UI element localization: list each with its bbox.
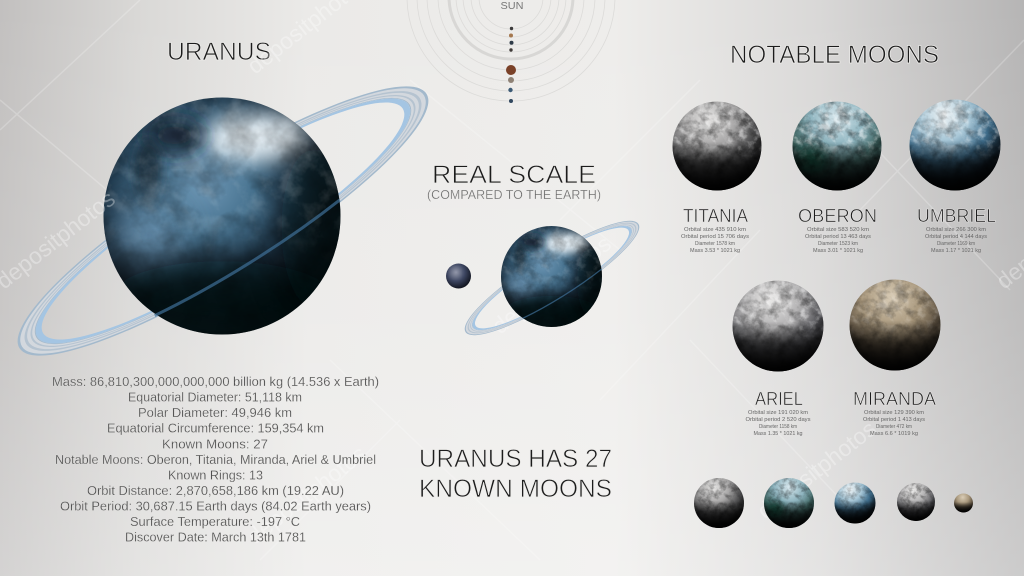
planet facts: Discover Date: March 13th 1781 [125,530,306,545]
moon: Miranda: MIRANDA [853,389,936,409]
ring front arc [155,200,343,320]
moons size comparison row [694,478,973,528]
planet facts: Equatorial Diameter: 51,118 km [128,390,302,405]
planet facts: Polar Diameter: 49,946 km [138,405,292,420]
watermarks: depositphotos [752,415,881,524]
moon: Ariel [732,280,824,437]
moon: Oberon: OBERON [798,206,877,226]
planet [104,98,352,337]
moon: Titania: Diameter 1578 km [695,241,735,247]
moon: Oberon: Orbital size 583 520 km [807,227,869,233]
moon: Titania: Orbital size 435 910 km [684,227,746,233]
title: Uranus: URANUS [167,38,271,66]
moon: Titania: Orbital period 15 706 days [681,234,749,240]
moon: Titania [672,102,762,254]
planet facts: Surface Temperature: -197 °C [130,514,300,529]
planet facts: Orbit Period: 30,687.15 Earth days (84.02 Earth years) [60,499,371,514]
planet facts: Equatorial Circumference: 159,354 km [107,421,324,436]
moon: Miranda: Orbital size 129 390 km [864,410,924,416]
moon: Miranda [850,280,940,437]
moon: Umbriel: Mass 1.17 * 1021 kg [931,248,981,254]
moon: Umbriel: Orbital size 266 300 km [926,227,986,233]
solar system planets [506,27,516,103]
moon: Oberon [792,102,882,254]
heading: real scale: REAL SCALE [432,161,596,189]
heading: real scale [427,161,601,202]
watermarks: depositphotos [487,230,616,339]
moon: Ariel: ARIEL [755,389,803,409]
moon: Titania: Mass 3.53 * 1021 kg [690,248,740,254]
watermarks: depositphotos [242,440,371,549]
scale comparison [446,205,650,351]
moon: Miranda: Mass 6.6 * 1019 kg [870,431,918,437]
heading: real scale: (COMPARED TO THE EARTH) [427,187,601,202]
moon: Miranda: Orbital period 1 413 days [863,417,925,423]
moon: Titania: TITANIA [683,206,748,226]
planet facts: Orbit Distance: 2,870,658,186 km (19.22 AU) [87,483,344,498]
moon: Oberon: Diameter 1523 km [818,241,858,247]
moon: Oberon: Orbital period 13 463 days [805,234,871,240]
moon: Miranda: Diameter 472 km [876,424,912,430]
heading: notable moons: NOTABLE MOONS [730,41,939,69]
main planet with rings [0,50,454,392]
planet facts: Known Rings: 13 [168,467,263,482]
solar system diagram [407,0,615,103]
earth [446,264,471,288]
caption: known moons: URANUS HAS 27 [419,445,612,473]
caption: known moons [419,445,612,503]
moon: Oberon: Mass 3.01 * 1021 kg [813,248,863,254]
moon: Ariel: Diameter 1158 km [759,424,797,430]
small ring [454,205,650,351]
moon: Ariel: Orbital size 191 020 km [748,410,808,416]
rings [0,50,454,392]
planet facts [52,374,379,545]
small ring front arc [523,269,603,320]
moon: Ariel: Mass 1.35 * 1021 kg [754,431,803,437]
small planet [501,226,607,328]
moon: Umbriel: Diameter 1169 km [937,241,975,247]
moon: Umbriel: UMBRIEL [917,206,996,226]
sun label: SUN [500,0,524,12]
moon: Ariel: Orbital period 2 520 days [746,417,811,423]
moon: Umbriel: Orbital period 4 144 days [925,234,987,240]
moon: Umbriel [910,100,1000,254]
planet facts: Notable Moons: Oberon, Titania, Miranda, Ariel & Umbriel [55,452,376,467]
caption: known moons: KNOWN MOONS [419,475,612,503]
planet facts: Known Moons: 27 [162,436,268,451]
planet facts: Mass: 86,810,300,000,000,000 billion kg (14.536 x Earth) [52,374,379,389]
